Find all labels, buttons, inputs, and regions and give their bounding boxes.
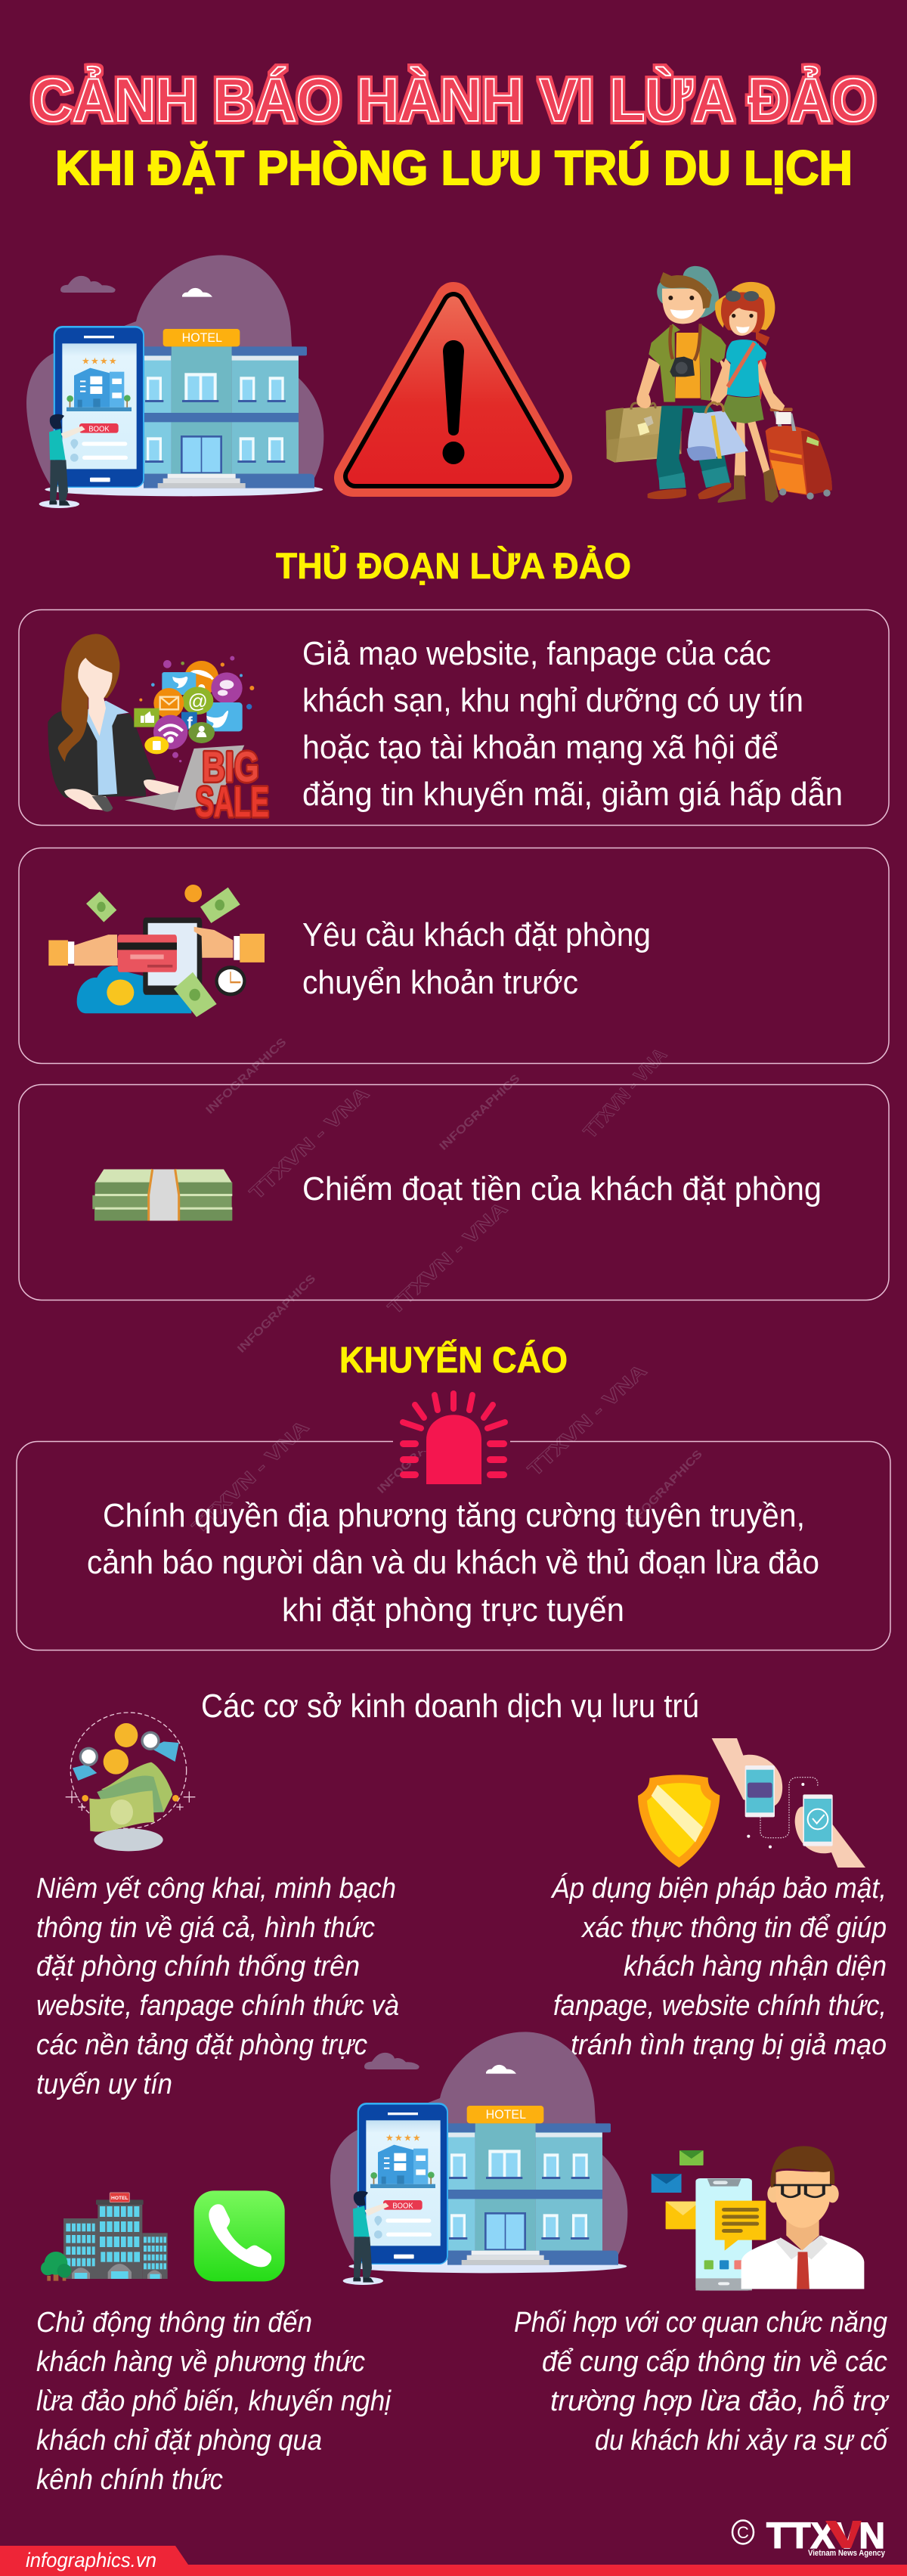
icon: woman with social media and big sale: SALE	[196, 779, 269, 826]
text: local government recommendation: Chính quyền địa phương tăng cường tuyên truyền,	[103, 1497, 805, 1534]
illustration: hotel and phone booking, lower: HOTEL	[486, 2107, 526, 2122]
text: left column, transparent pricing: website, fanpage chính thức và	[36, 1990, 399, 2022]
text: local government recommendation: khi đặt phòng trực tuyến	[282, 1592, 624, 1629]
icon: woman with social media and big sale	[48, 634, 269, 826]
text: bottom left, informing customers: khách chỉ đặt phòng qua	[36, 2425, 322, 2457]
watermarks: TTXVN - VNA	[188, 1416, 313, 1538]
heading: scam tactics: THỦ ĐOẠN LỪA ĐẢO	[276, 545, 631, 587]
text: bottom left, informing customers: kênh chính thức	[36, 2464, 223, 2496]
text: local government recommendation: cảnh báo người dân và du khách về thủ đoạn lừa đảo	[87, 1544, 819, 1581]
title line 1: CẢNH BÁO HÀNH VI LỪA ĐẢO	[31, 66, 876, 135]
icon: warning triangle	[353, 301, 553, 478]
subheading: accommodation businesses: Các cơ sở kinh doanh dịch vụ lưu trú	[201, 1688, 699, 1725]
icon: woman with social media and big sale: @	[187, 690, 208, 712]
footer site name: infographics.vn	[26, 2549, 156, 2571]
icon: card payment on tablet	[48, 885, 265, 1017]
text: bottom left, informing customers: khách hàng về phương thức	[36, 2346, 365, 2378]
panel: money taken	[19, 1084, 889, 1300]
text: local government recommendation	[87, 1497, 819, 1629]
text: fake websites	[302, 635, 843, 813]
title line 2: KHI ĐẶT PHÒNG LƯU TRÚ DU LỊCH	[55, 141, 853, 195]
text: prepayment request: Yêu cầu khách đặt phòng	[302, 916, 651, 953]
text: fake websites: khách sạn, khu nghỉ dưỡng có uy tín	[302, 682, 803, 719]
illustration: hotel and phone booking: BOOK	[88, 426, 110, 434]
text: left column, transparent pricing	[36, 1873, 399, 2100]
text: prepayment request	[302, 916, 651, 1001]
watermarks: INFOGRAPHICS	[203, 1036, 289, 1117]
icon: coins and banknotes	[66, 1713, 195, 1851]
text: prepayment request: chuyển khoản trước	[302, 964, 578, 1001]
logo: TTXVN: C	[737, 2523, 749, 2542]
text: left column, transparent pricing: tuyến uy tín	[36, 2069, 172, 2100]
icon: woman with social media and big sale: BIG	[202, 743, 259, 791]
logo: TTXVN: Vietnam News Agency	[808, 2549, 886, 2558]
icon: hotel buildings: HOTEL	[111, 2196, 128, 2201]
text: left column, transparent pricing: đặt phòng chính thống trên	[36, 1951, 360, 1982]
text: left column, transparent pricing: Niêm yết công khai, minh bạch	[36, 1873, 396, 1905]
text: bottom right, coordinating with authorities	[514, 2307, 890, 2457]
text: right column, security measures: xác thực thông tin để giúp	[580, 1912, 887, 1944]
logo: TTXVN: TTXVN	[766, 2516, 885, 2556]
watermarks: INFOGRAPHICS	[235, 1273, 318, 1356]
illustration: hotel and phone booking, lower: BOOK	[392, 2202, 413, 2211]
watermarks: INFOGRAPHICS	[375, 1415, 459, 1496]
text: fake websites: Giả mạo website, fanpage của các	[302, 635, 771, 672]
text: bottom right, coordinating with authorities: để cung cấp thông tin về các	[542, 2346, 887, 2378]
illustration: hotel and phone booking	[26, 255, 323, 508]
illustration: tourist couple with luggage	[606, 266, 832, 503]
icon: woman with social media and big sale: f	[187, 713, 193, 732]
text: right column, security measures: khách hàng nhận diện	[624, 1951, 887, 1982]
text: bottom left, informing customers: lừa đảo phổ biến, khuyến nghị	[36, 2385, 392, 2417]
icon: stack of banknotes	[92, 1170, 232, 1220]
watermarks: INFOGRAPHICS	[624, 1448, 705, 1532]
watermarks: TTXVN - VNA	[580, 1044, 671, 1142]
text: left column, transparent pricing: các nền tảng đặt phòng trực	[36, 2029, 367, 2061]
illustration: hotel and phone booking, lower	[330, 2032, 627, 2285]
text: fake websites: đăng tin khuyến mãi, giảm giá hấp dẫn	[302, 776, 843, 813]
footer band	[0, 2546, 907, 2576]
text: fake websites: hoặc tạo tài khoản mạng xã hội để	[302, 729, 779, 766]
text: bottom right, coordinating with authorities: trường hợp lừa đảo, hỗ trợ	[550, 2384, 890, 2417]
watermarks: TTXVN - VNA	[524, 1360, 651, 1480]
watermarks	[188, 1036, 705, 1538]
watermarks: TTXVN - VNA	[384, 1198, 512, 1319]
text: bottom left, informing customers: Chủ động thông tin đến	[36, 2307, 312, 2339]
text: right column, security measures: Áp dụng biện pháp bảo mật,	[550, 1872, 887, 1905]
panel: prepayment request	[19, 848, 889, 1063]
icon: phone app	[194, 2190, 285, 2281]
icon: alarm siren	[393, 1393, 510, 1484]
watermarks: INFOGRAPHICS	[437, 1072, 522, 1153]
illustration: hotel and phone booking: ★★★★	[82, 356, 117, 367]
icon: security shield and phones	[638, 1738, 865, 1868]
illustration: hotel and phone booking: HOTEL	[182, 330, 222, 345]
icon: hotel buildings	[41, 2193, 168, 2281]
text: left column, transparent pricing: thông tin về giá cả, hình thức	[36, 1912, 375, 1944]
illustration: hotel and phone booking, lower: ★★★★	[385, 2133, 421, 2144]
text: right column, security measures: tránh tình trạng bị giả mạo	[571, 2029, 887, 2061]
text: bottom left, informing customers	[36, 2307, 392, 2496]
watermarks: TTXVN - VNA	[246, 1083, 373, 1204]
icon: man with phone and messages	[652, 2146, 864, 2290]
text: money taken: Chiếm đoạt tiền của khách đặt phòng	[302, 1170, 822, 1207]
panel: fake websites	[19, 609, 889, 826]
text: right column, security measures	[550, 1872, 887, 2061]
heading: recommendations: KHUYẾN CÁO	[339, 1340, 568, 1381]
panel: local government recommendation	[17, 1441, 890, 1650]
